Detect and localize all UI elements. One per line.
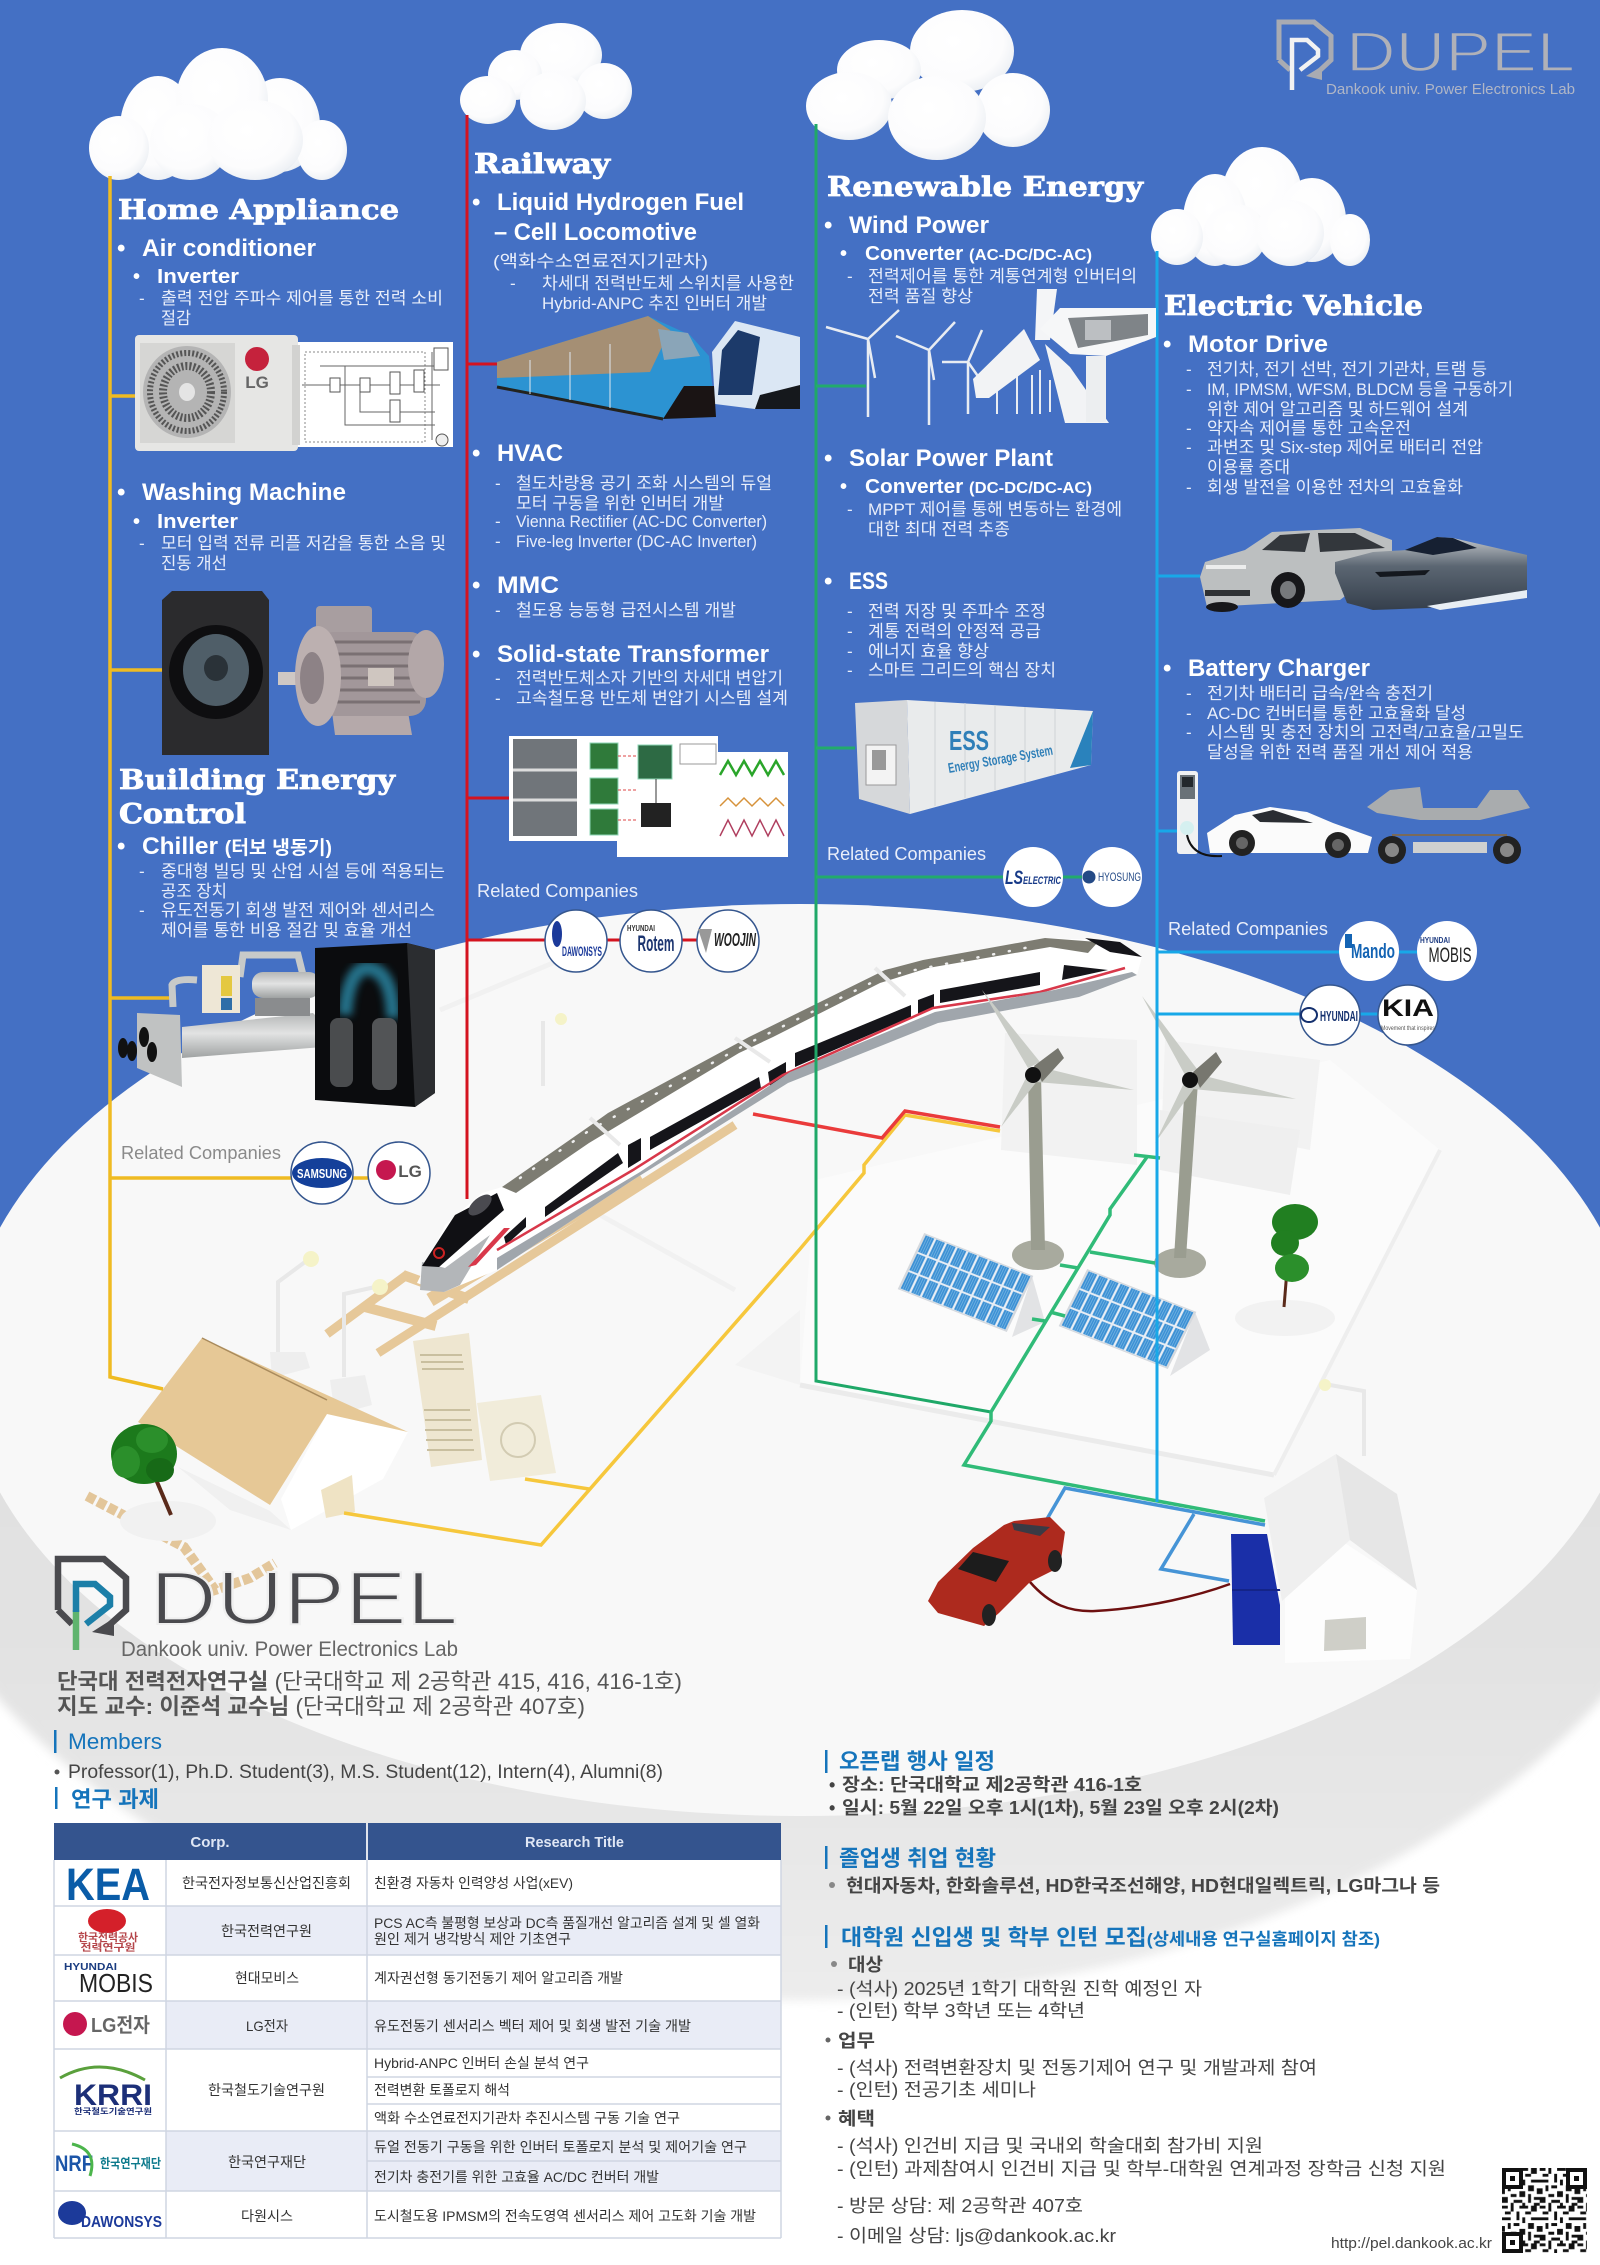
solar power plant text: • xyxy=(840,476,847,498)
clouds xyxy=(89,10,1370,266)
air conditioner text: 절감 xyxy=(161,309,191,328)
street lamps xyxy=(270,1013,1364,1456)
logo mark xyxy=(1279,22,1331,90)
duties: 업무 xyxy=(838,2031,875,2051)
lab name: Dankook univ. Power Electronics Lab xyxy=(121,1638,458,1661)
logo: ls electric xyxy=(1003,847,1063,907)
related companies: building: Related Companies xyxy=(121,1143,281,1163)
wind power text: Converter (AC-DC/DC-AC) xyxy=(865,243,1092,265)
hydrogen locomotive text: (액화수소연료전지기관차) xyxy=(493,252,708,271)
image: washing machine xyxy=(162,591,269,755)
hydrogen locomotive text: 차세대 전력반도체 스위치를 사용한 xyxy=(542,274,794,293)
row: KEPCO: 원인 제거 냉각방식 제안 기초연구 xyxy=(374,1931,571,1947)
chiller text: - xyxy=(139,862,145,881)
logo: hyundai mobis xyxy=(1417,921,1477,981)
lab info block xyxy=(57,1556,682,1719)
heading: building energy control: Control xyxy=(119,799,246,830)
logo: hyundai rotem: Rotem xyxy=(638,931,674,956)
contact xyxy=(837,2196,1116,2246)
row: Mobis xyxy=(64,1962,623,1998)
motor drive text: - xyxy=(1186,419,1192,438)
logo: kia: KIA xyxy=(1382,995,1434,1022)
row: Mobis: MOBIS xyxy=(79,1968,153,1998)
row: NRF xyxy=(55,2139,747,2185)
air conditioner text: • xyxy=(117,235,125,262)
image: outdoor unit xyxy=(135,335,300,451)
row: Dawonsys: 다원시스 xyxy=(241,2208,293,2224)
mmc text xyxy=(472,572,736,620)
washing machine text: Washing Machine xyxy=(142,479,346,506)
heading: renewable energy: Renewable Energy xyxy=(827,172,1144,203)
heading: electric vehicle: Electric Vehicle xyxy=(1164,291,1423,322)
open lab schedule: • xyxy=(829,1798,835,1818)
hvac text: 모터 구동을 위한 인버터 개발 xyxy=(516,494,724,513)
logo: woojin xyxy=(697,910,759,972)
hvac text: • xyxy=(472,440,480,467)
battery charger text: - xyxy=(1186,684,1192,703)
row: KRRI: 한국철도기술연구원 xyxy=(74,2106,152,2116)
battery charger text: AC-DC 컨버터를 통한 고효율화 달성 xyxy=(1207,704,1466,723)
motor drive text: - xyxy=(1186,438,1192,457)
chiller text: 유도전동기 회생 발전 제어와 센서리스 xyxy=(161,901,435,920)
row: KEPCO: 전력연구원 xyxy=(80,1941,136,1954)
red toy car xyxy=(928,1517,1230,1626)
image: ess container: ESS xyxy=(949,725,989,756)
chiller text: Chiller (터보 냉동기) xyxy=(142,833,332,860)
panel: renewable energy xyxy=(824,172,1156,907)
target: - (석사) 2025년 1학기 대학원 진학 예정인 자 xyxy=(837,1979,1202,1999)
battery charger text: Battery Charger xyxy=(1188,655,1370,682)
logo: hyundai mobis: HYUNDAI xyxy=(1420,936,1450,945)
wind power text: 전력 품질 향상 xyxy=(868,287,973,306)
battery charger text xyxy=(1163,655,1524,762)
open lab schedule: 장소: 단국대학교 제2공학관 416-1호 xyxy=(842,1775,1142,1795)
chiller text: • xyxy=(117,833,125,860)
chiller text xyxy=(117,833,445,940)
main train xyxy=(417,938,1142,1292)
recruitment: 대학원 신입생 및 학부 인턴 모집 (상세내용 연구실홈페이지 참조) xyxy=(841,1925,1380,1950)
hvac text: - xyxy=(495,532,501,551)
wind turbines model xyxy=(982,990,1296,1278)
row: Dawonsys xyxy=(58,2201,756,2231)
hvac text: - xyxy=(495,474,501,493)
mmc text: • xyxy=(472,572,480,599)
open lab schedule xyxy=(825,1749,1279,1818)
heading: building energy control xyxy=(119,765,396,830)
target: 대상 xyxy=(848,1955,883,1975)
logo: samsung: SAMSUNG xyxy=(297,1166,347,1181)
wordmark bottom: DUPEL xyxy=(150,1556,458,1640)
solid-state transformer text: Solid-state Transformer xyxy=(497,641,769,668)
blue battery xyxy=(1231,1534,1281,1645)
solar power plant text: MPPT 제어를 통해 변동하는 환경에 xyxy=(868,500,1122,519)
solid-state transformer text xyxy=(472,641,788,708)
members: Professor(1), Ph.D. Student(3), M.S. Student(12), Intern(4), Alumni(8) xyxy=(68,1762,663,1783)
house with wood roof xyxy=(138,1338,408,1530)
benefits: 혜택 xyxy=(838,2109,875,2129)
graduate employment: 현대자동차, 한화솔루션, HD한국조선해양, HD현대일렉트릭, LG마그나 등 xyxy=(846,1876,1440,1896)
image: transformer test setup xyxy=(509,736,788,857)
row: KRRI: KRRI xyxy=(74,2079,152,2112)
lab address: 단국대 전력전자연구실 (단국대학교 제 2공학관 415, 416, 416-1호) xyxy=(57,1669,682,1694)
image: wind turbines xyxy=(826,289,1156,425)
duties: - (인턴) 전공기초 세미나 xyxy=(837,2080,1036,2100)
scene platforms xyxy=(440,960,1440,1475)
image: charger and white car xyxy=(1177,771,1372,858)
chiller text: 중대형 빌딩 및 산업 시설 등에 적용되는 xyxy=(161,862,445,881)
connection lines xyxy=(110,115,1417,1581)
solar power plant text: • xyxy=(824,445,832,472)
air conditioner text: • xyxy=(133,266,140,288)
motor drive text: • xyxy=(1163,331,1171,358)
row: Mobis: 계자권선형 동기전동기 제어 알고리즘 개발 xyxy=(374,1970,623,1986)
row: Mobis: 현대모비스 xyxy=(235,1970,299,1986)
battery charger text: - xyxy=(1186,723,1192,742)
logo: mando: Mando xyxy=(1351,941,1395,963)
benefits xyxy=(826,2109,1446,2179)
green line: renewable energy xyxy=(816,124,1265,1521)
heading: railway: Railway xyxy=(474,149,612,180)
hvac text: Five-leg Inverter (DC-AC Inverter) xyxy=(516,532,757,551)
image: control diagram xyxy=(298,342,453,447)
chiller text: - xyxy=(139,901,145,920)
image: hydrogen trains xyxy=(497,316,800,419)
row: NRF: 한국연구재단 xyxy=(100,2156,161,2171)
row: KEPCO: 한국전력연구원 xyxy=(221,1923,312,1939)
contact: - 방문 상담: 제 2공학관 407호 xyxy=(837,2196,1083,2216)
ess text: 전력 저장 및 주파수 조정 xyxy=(868,602,1046,621)
fence xyxy=(87,1496,275,1590)
motor drive text xyxy=(1163,331,1513,497)
row: KEA: KEA xyxy=(66,1859,150,1910)
motor drive text: - xyxy=(1186,360,1192,379)
motor drive text: Motor Drive xyxy=(1188,331,1328,358)
benefits: - (석사) 인건비 지급 및 국내외 학술대회 참가비 지원 xyxy=(837,2136,1263,2156)
graduate employment xyxy=(825,1846,1440,1896)
ess text: 계통 전력의 안정적 공급 xyxy=(868,622,1041,641)
blue line: battery xyxy=(1047,1488,1265,1581)
mmc text: - xyxy=(495,601,501,620)
logo subtitle: Dankook univ. Power Electronics Lab xyxy=(1326,81,1575,98)
logo: hyundai mobis: MOBIS xyxy=(1428,944,1472,967)
ess text: 에너지 효율 향상 xyxy=(868,642,989,661)
table header xyxy=(190,1834,624,1851)
hydrogen locomotive text: • xyxy=(472,189,480,216)
row: KRRI xyxy=(60,2055,680,2126)
cloud: home appliance xyxy=(89,48,347,180)
tree right xyxy=(1235,1204,1335,1336)
chiller text: 공조 장치 xyxy=(161,882,227,901)
ess text: - xyxy=(847,661,853,680)
members: Members xyxy=(68,1729,162,1754)
row: LG xyxy=(63,2012,691,2037)
solid-state transformer text: • xyxy=(472,641,480,668)
image: electric motor xyxy=(278,606,444,735)
solid-state transformer text: 전력반도체소자 기반의 차세대 변압기 xyxy=(516,669,783,688)
website url: http://pel.dankook.ac.kr xyxy=(1331,2235,1492,2252)
logo: kia: Movement that inspires xyxy=(1381,1026,1435,1032)
benefits: - (인턴) 과제참여시 인건비 지급 및 학부-대학원 연계과정 장학금 신청 지원 xyxy=(837,2159,1446,2179)
open lab schedule: • xyxy=(829,1775,835,1795)
row: Mobis: HYUNDAI xyxy=(64,1962,117,1973)
hydrogen locomotive text: – Cell Locomotive xyxy=(494,219,697,246)
row: KEPCO xyxy=(78,1909,760,1954)
logo: hyundai rotem: HYUNDAI xyxy=(627,924,655,933)
row: KEA xyxy=(66,1859,573,1910)
air conditioner text: - xyxy=(139,289,145,308)
logo wordmark: DUPEL xyxy=(1346,20,1575,83)
hvac text xyxy=(472,440,772,551)
wind power text xyxy=(824,212,1137,306)
logo: hyundai rotem xyxy=(620,910,682,972)
image: ess container: Energy Storage System xyxy=(947,742,1054,776)
logo: hyosung: HYOSUNG xyxy=(1098,870,1141,884)
solar power plant text xyxy=(824,445,1122,539)
logo: samsung xyxy=(291,1142,353,1204)
ess text: • xyxy=(824,568,832,595)
image: electric car xyxy=(1200,528,1392,612)
washing machine text: • xyxy=(133,511,140,533)
cyan line: electric vehicle xyxy=(1157,251,1417,1502)
hvac text: 철도차량용 공기 조화 시스템의 듀얼 xyxy=(516,474,772,493)
logo: hyosung xyxy=(1082,847,1142,907)
hvac text: - xyxy=(495,512,501,531)
open lab schedule: 일시: 5월 22일 오후 1시(1차), 5월 23일 오후 2시(2차) xyxy=(842,1798,1279,1818)
wooden track xyxy=(327,1125,735,1353)
logo: ls electric: ELECTRIC xyxy=(1023,875,1062,887)
battery charger text: 달성을 위한 전력 품질 개선 제어 적용 xyxy=(1207,743,1473,762)
ess text xyxy=(824,568,1056,680)
recruitment xyxy=(825,1925,1446,2246)
image: ess container xyxy=(855,700,1093,814)
motor drive text: 이용률 증대 xyxy=(1207,458,1290,477)
ess text: - xyxy=(847,622,853,641)
yellow line: home appliance xyxy=(110,176,1000,1545)
solar power plant text: 대한 최대 전력 추종 xyxy=(868,520,1010,539)
row: KEA: 한국전자정보통신산업진흥회 xyxy=(182,1875,351,1891)
wind power text: 전력제어를 통한 계통연계형 인버터의 xyxy=(868,267,1137,286)
logo: hyundai xyxy=(1300,985,1360,1045)
research table xyxy=(54,1823,781,2238)
row: LG: LG전자 xyxy=(91,2014,150,2037)
solar power plant text: - xyxy=(847,500,853,519)
panel: home appliance xyxy=(117,195,453,1204)
washing machine text: • xyxy=(117,479,125,506)
related companies: railway: Related Companies xyxy=(477,881,638,901)
hvac text: Vienna Rectifier (AC-DC Converter) xyxy=(516,512,767,531)
row: KEPCO: PCS AC측 불평형 보상과 DC측 품질개선 알고리즘 설계 및 셀 열화 xyxy=(374,1915,760,1931)
logo mark bottom xyxy=(58,1559,126,1650)
hydrogen locomotive text: Liquid Hydrogen Fuel xyxy=(497,189,744,216)
motor drive text: - xyxy=(1186,380,1192,399)
logo: lg: LG xyxy=(398,1162,422,1181)
cloud: railway xyxy=(460,23,632,130)
washing machine text: 진동 개선 xyxy=(161,554,227,573)
mmc text: MMC xyxy=(497,572,559,599)
solid-state transformer text: - xyxy=(495,669,501,688)
white house model xyxy=(1264,1454,1417,1663)
logo: dupel top right xyxy=(1279,20,1575,98)
air conditioner text: Air conditioner xyxy=(142,235,316,262)
motor drive text: 회생 발전을 이용한 전차의 고효율화 xyxy=(1207,478,1463,497)
motor drive text: 약자속 제어를 통한 고속운전 xyxy=(1207,419,1411,438)
logo: dawonsys: DAWONSYS xyxy=(562,943,602,959)
cloud: electric vehicle xyxy=(1151,147,1370,266)
qr code xyxy=(1502,2168,1587,2253)
air conditioner text xyxy=(117,235,443,328)
battery charger text: • xyxy=(1163,655,1171,682)
solid-state transformer text: 고속철도용 반도체 변압기 시스템 설계 xyxy=(516,689,788,708)
motor drive text: IM, IPMSM, WFSM, BLDCM 등을 구동하기 xyxy=(1207,380,1513,399)
target xyxy=(831,1955,1202,2021)
ess text: 스마트 그리드의 핵심 장치 xyxy=(868,661,1056,680)
target: - (인턴) 학부 3학년 또는 4학년 xyxy=(837,2001,1085,2021)
hydrogen locomotive text: Hybrid-ANPC 추진 인버터 개발 xyxy=(542,294,767,313)
logo: hyundai: HYUNDAI xyxy=(1320,1008,1358,1025)
heading: building energy control: Building Energy xyxy=(119,765,396,796)
row: KRRI: 한국철도기술연구원 xyxy=(208,2082,325,2098)
related companies: renewable: Related Companies xyxy=(827,844,986,864)
row: NRF: NRF xyxy=(55,2151,93,2176)
hydrogen locomotive text xyxy=(472,189,794,313)
red line: railway xyxy=(467,115,1000,1199)
row: NRF: 전기차 충전기를 위한 고효율 AC/DC 컨버터 개발 xyxy=(374,2169,659,2185)
ess text: ESS xyxy=(849,568,888,595)
washing machine text: - xyxy=(139,534,145,553)
heading: home appliance: Home Appliance xyxy=(118,195,399,226)
wind power text: - xyxy=(847,267,853,286)
image: ev platform chassis xyxy=(1367,787,1530,864)
research projects heading: 연구 과제 xyxy=(71,1787,159,1812)
hydrogen locomotive text: - xyxy=(510,274,516,293)
panel: railway xyxy=(472,149,800,972)
row: KRRI: 액화 수소연료전지기관차 추진시스템 구동 기술 연구 xyxy=(374,2110,680,2126)
duties xyxy=(826,2031,1317,2100)
table header: Research Title xyxy=(525,1834,624,1851)
solid-state transformer text: - xyxy=(495,689,501,708)
solar power plant text: Solar Power Plant xyxy=(849,445,1053,472)
row: NRF: 듀얼 전동기 구동을 위한 인버터 토폴로지 분석 및 제어기술 연구 xyxy=(374,2139,747,2155)
related companies: ev: Related Companies xyxy=(1168,919,1328,939)
air conditioner text: Inverter xyxy=(157,266,239,288)
logo: lg xyxy=(368,1142,430,1204)
tree near house xyxy=(111,1424,216,1541)
motor drive text: - xyxy=(1186,478,1192,497)
table header: Corp. xyxy=(190,1834,230,1851)
cloud: renewable energy xyxy=(806,10,1050,160)
contact: - 이메일 상담: ljs@dankook.ac.kr xyxy=(837,2226,1116,2246)
members xyxy=(54,1729,663,1783)
row: Dawonsys: 도시철도용 IPMSM의 전속도영역 센서리스 제어 고도화 기술 개발 xyxy=(374,2208,756,2224)
image: outdoor unit: LG xyxy=(245,373,269,392)
logo: dawonsys xyxy=(545,910,607,972)
chiller text: 제어를 통한 비용 절감 및 효율 개선 xyxy=(161,921,412,940)
battery charger text: 전기차 배터리 급속/완속 충전기 xyxy=(1207,684,1433,703)
image: chiller xyxy=(118,943,435,1107)
row: KEA: 친환경 자동차 인력양성 사업(xEV) xyxy=(374,1875,573,1891)
wind power text: • xyxy=(824,212,832,239)
air conditioner text: 출력 전압 주파수 제어를 통한 전력 소비 xyxy=(161,289,443,308)
motor drive text: 전기차, 전기 선박, 전기 기관차, 트램 등 xyxy=(1207,360,1487,379)
row: LG: 유도전동기 센서리스 벡터 제어 및 회생 발전 기술 개발 xyxy=(374,2018,691,2034)
logo: kia xyxy=(1378,985,1438,1045)
professor: 지도 교수: 이준석 교수님 (단국대학교 제 2공학관 407호) xyxy=(57,1694,585,1719)
duties: - (석사) 전력변환장치 및 전동기제어 연구 및 개발과제 참여 xyxy=(837,2058,1317,2078)
panel: electric vehicle xyxy=(1163,291,1530,1045)
row: KRRI: 전력변환 토폴로지 해석 xyxy=(374,2082,510,2098)
motor drive text: 과변조 및 Six-step 제어로 배터리 전압 xyxy=(1207,438,1483,457)
ess text: - xyxy=(847,602,853,621)
logo: ls electric: LS xyxy=(1005,868,1023,889)
hvac text: HVAC xyxy=(497,440,563,467)
motor drive text: 위한 제어 알고리즘 및 하드웨어 설계 xyxy=(1207,400,1468,419)
wind power text: Wind Power xyxy=(849,212,989,239)
row: KEPCO: 한국전력공사 xyxy=(78,1930,138,1944)
wind power text: • xyxy=(840,243,847,265)
washing machine text: Inverter xyxy=(157,511,238,533)
washing machine text: 모터 입력 전류 리플 저감을 통한 소음 및 xyxy=(161,534,446,553)
open lab schedule: 오픈랩 행사 일정 xyxy=(839,1749,995,1774)
mmc text: 철도용 능동형 급전시스템 개발 xyxy=(516,601,736,620)
image: electric boat xyxy=(1335,537,1527,610)
solar panels xyxy=(899,1234,1210,1376)
graduate employment: 졸업생 취업 현황 xyxy=(839,1846,996,1871)
battery charger text: - xyxy=(1186,704,1192,723)
logo: woojin: WOOJIN xyxy=(714,930,757,950)
miniature air conditioner and washer xyxy=(413,1333,556,1481)
solar power plant text: Converter (DC-DC/DC-AC) xyxy=(865,476,1092,498)
row: Dawonsys: DAWONSYS xyxy=(81,2214,162,2231)
washing machine text xyxy=(117,479,446,573)
battery charger text: 시스템 및 충전 장치의 고전력/고효율/고밀도 xyxy=(1207,723,1524,742)
logo: mando xyxy=(1339,921,1399,981)
row: LG: LG전자 xyxy=(246,2018,288,2034)
row: NRF: 한국연구재단 xyxy=(228,2154,306,2170)
ess text: - xyxy=(847,642,853,661)
row: KRRI: Hybrid-ANPC 인버터 손실 분석 연구 xyxy=(374,2055,589,2071)
